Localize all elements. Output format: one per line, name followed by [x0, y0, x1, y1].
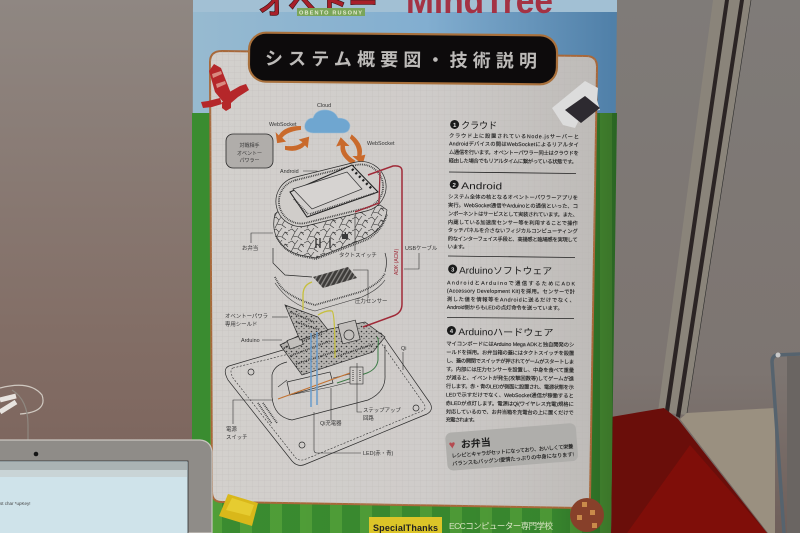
- section 2: Android: 実行。WebSocket通信やArduinoとの通信といった、コ: [448, 201, 578, 210]
- box: rival event player: オベントー: [237, 151, 262, 157]
- main panel: [210, 51, 597, 508]
- note: obento: バランスもバッグン!愛情たっぷりの中身になります!: [452, 450, 574, 468]
- label: power switch: 電源: [226, 425, 237, 433]
- Qi charger plate: [225, 333, 431, 465]
- shield board: [285, 305, 328, 340]
- box: rival event player: [226, 134, 273, 168]
- label: USB cable: USBケーブル: [405, 244, 438, 252]
- divider: [448, 256, 575, 258]
- icon: heart: ♥: [448, 439, 456, 452]
- grass band: [192, 113, 617, 533]
- note: obento: レシピとキャラがセットになっており、おいしくて栄養: [451, 442, 574, 460]
- section 1: cloud: クラウド: [461, 121, 497, 132]
- section 4: Arduino hardware: 充電されます。: [446, 415, 478, 424]
- label: power switch: スイッチ: [226, 434, 248, 441]
- layer: pressure sensor: [273, 248, 386, 311]
- cable: blue pair: [311, 332, 317, 407]
- divider: [447, 318, 574, 319]
- section 2: Android: 内蔵している加速度センサー等を利用することで操作: [448, 218, 579, 227]
- icon: cookie: [570, 498, 604, 532]
- section 2: Android: タッチパネルを介さないフィジカルコンピューティング: [448, 226, 579, 235]
- section 3: Arduino software: [447, 264, 576, 312]
- label: Android: Android: [280, 169, 299, 175]
- section 4: Arduino hardware: Arduinoハードウェア: [458, 327, 553, 339]
- label: bento: お弁当: [242, 244, 258, 252]
- label: event shield: [225, 313, 288, 328]
- section 4: Arduino hardware: し、蓋の開閉でスイッチが押されてゲームがスタートしま: [446, 356, 574, 366]
- label: LED: [314, 412, 393, 457]
- bento base: [272, 345, 385, 420]
- section 4: Arduino hardware: ールドを採用。お弁当箱の蓋にはタクトスイッチを設置: [446, 348, 575, 357]
- window frame: [658, 0, 751, 418]
- special thanks: ECCコンピューター専門学校: [449, 521, 553, 531]
- label: event shield: オベントーパワラ: [225, 313, 268, 320]
- title pill: [249, 33, 557, 84]
- label: LED: LED(赤・青): [363, 449, 393, 457]
- label: step up: 回路: [363, 414, 374, 422]
- label: pressure sensor: [353, 270, 387, 305]
- section 4: Arduino hardware: LEDで示すだけでなく、WebSocket通信が稼働すると: [446, 390, 574, 400]
- section 3: Arduino software: 測した値を情報等をAndroidに送るだけでなく、: [447, 295, 575, 304]
- icon: rice ball: [552, 81, 600, 128]
- label: WebSocket right: WebSocket: [367, 141, 395, 147]
- label: step up: ステップアップ: [363, 407, 401, 414]
- section 3: Arduino software: Android側からもLEDの点灯命令を送っています。: [447, 303, 563, 312]
- section 2: Android: 的なインターフェイス手段と、高揚感と臨場感を実現して: [448, 234, 578, 244]
- power switch slot: [258, 403, 277, 424]
- laptop: [0, 440, 212, 533]
- section 2: Android: [448, 180, 579, 252]
- section 3: Arduino software: Arduinoソフトウェア: [459, 266, 552, 277]
- step-up board: [350, 363, 363, 412]
- layer: bento lid with Android: [271, 156, 391, 232]
- label: Qi: [401, 346, 406, 370]
- divider: [449, 172, 576, 174]
- cable: yellow: [303, 282, 335, 358]
- layer: bento food: [274, 205, 387, 259]
- icon: android phone: [290, 165, 378, 217]
- label: Qi coil: [320, 388, 342, 427]
- cable: green: [337, 337, 378, 383]
- icon: red pixel squid: [201, 64, 249, 111]
- section 4: Arduino hardware: 対応しているので、お弁当箱を充電台の上に置くだけで: [446, 407, 574, 417]
- cable: ACK red: [355, 172, 380, 212]
- section 1: cloud: 1: [453, 123, 457, 129]
- label: Qi: Qi: [401, 346, 406, 352]
- label: Arduino: [241, 338, 282, 344]
- laptop screen: [0, 461, 188, 533]
- label: event shield: 専用シールド: [225, 320, 257, 328]
- laptop: st char *upKey!: [0, 501, 31, 506]
- label: ADK: ADK (ACM): [394, 249, 400, 275]
- icon: cloud: [305, 110, 350, 133]
- section 1: cloud: ム通信を行います。オベントーパワラー同士はクラウドを: [449, 148, 579, 157]
- cable: USB red: [363, 166, 402, 327]
- note: obento: [445, 423, 578, 471]
- section 4: Arduino hardware: 4: [450, 329, 454, 335]
- special thanks: [369, 517, 553, 533]
- section 3: Arduino software: (Accessory Development Kit)を採用。センサーで計: [447, 286, 576, 296]
- section 2: Android: 2: [453, 183, 457, 189]
- note: obento: お弁当: [460, 436, 491, 451]
- section 1: cloud: クラウド上に設置されているNode.jsサーバーと: [449, 131, 579, 141]
- chair frame: [772, 352, 800, 533]
- section 4: Arduino hardware: 行します。赤・青のLEDが側面に設置され、電源状態を示: [446, 382, 574, 391]
- section 2: Android: Android: [461, 181, 502, 192]
- label: Cloud: Cloud: [317, 103, 331, 109]
- arrows: right WebSocket: [338, 136, 364, 163]
- label: bento: [242, 233, 273, 252]
- section 3: Arduino software: AndroidとArduinoで通信するためにADK: [447, 278, 576, 288]
- label: Android: [280, 169, 317, 177]
- label: Arduino: Arduino: [241, 338, 260, 344]
- title pill: システム概要図・技術説明: [265, 48, 537, 71]
- section 2: Android: システム全体の核となるオベントーパワラーアプリを: [448, 192, 578, 202]
- section 4: Arduino hardware: 赤LEDが点灯します。電源はQi(ワイヤレス充電)規格に: [446, 399, 574, 408]
- box: rival event player: パワラー: [239, 158, 260, 164]
- Arduino board: [280, 320, 385, 375]
- section 4: Arduino hardware: マイコンボードにはArduino Mega ADKと独自開発のシ: [446, 339, 574, 349]
- game logo: OBENTO RUSONY: [299, 10, 362, 16]
- poster board: [192, 0, 617, 533]
- section 3: Arduino software: 3: [451, 267, 455, 274]
- label: step up: [363, 407, 401, 422]
- label: tact switch: [339, 215, 377, 259]
- section 4: Arduino hardware: [446, 326, 575, 425]
- label: pressure sensor: 圧力センサー: [355, 297, 387, 305]
- section 4: Arduino hardware: が減ると、イベントが発生(攻撃回数等)してゲームが進: [446, 373, 575, 383]
- red floor: [611, 408, 775, 533]
- section 2: Android: います。: [448, 243, 468, 251]
- label: Qi coil: Qi充電器: [320, 419, 342, 427]
- section 1: cloud: Androidデバイスの間はWebSocketによるリアルタイ: [449, 139, 579, 149]
- label: WebSocket left: WebSocket: [269, 122, 297, 128]
- box: rival event player: 対戦相手: [239, 142, 260, 149]
- cable: orange: [278, 373, 350, 399]
- icon: yellow block: [219, 494, 258, 526]
- section 1: cloud: [449, 120, 579, 166]
- label: USB cable: [404, 244, 438, 269]
- section 4: Arduino hardware: す。内部には圧力センサーを設置し、中身を食べて重量: [446, 365, 575, 374]
- label: power switch: [226, 400, 273, 441]
- header pixel band: [193, 0, 617, 12]
- section 1: cloud: 経由した場合でもリアルタイムに繋がっている状態です。: [449, 156, 577, 166]
- special thanks: SpecialThanks: [373, 523, 438, 533]
- section 2: Android: ンポーネントはサービスとして実装されています。また、: [448, 209, 578, 219]
- arrows: left WebSocket: [277, 127, 308, 150]
- label: tact switch: タクトスイッチ: [339, 251, 377, 259]
- system diagram: [225, 103, 438, 465]
- white cable: [0, 385, 43, 440]
